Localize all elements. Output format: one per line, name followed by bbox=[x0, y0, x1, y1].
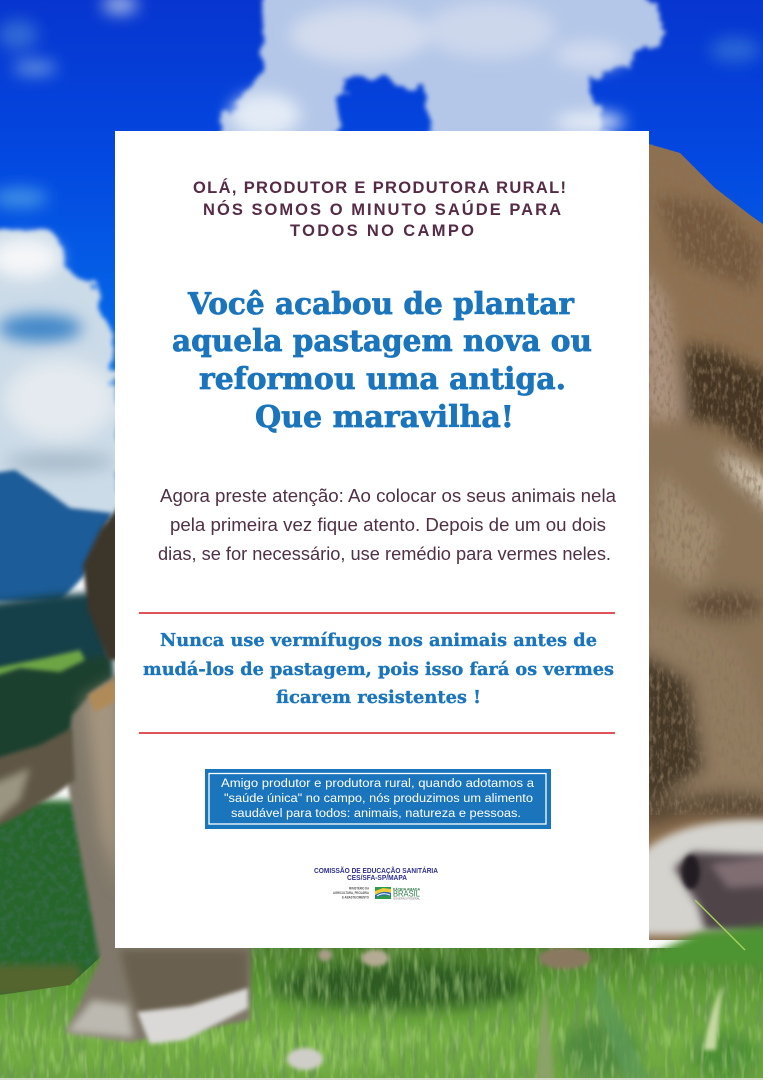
warning block: mudá-los de pastagem, pois isso fará os vermes bbox=[143, 659, 614, 680]
government logos: E ABASTECIMENTO bbox=[342, 896, 369, 900]
warning block: Nunca use vermífugos nos animais antes de bbox=[160, 630, 597, 651]
dark head shape bbox=[83, 505, 120, 660]
greeting heading: OLÁ, PRODUTOR E PRODUTORA RURAL! bbox=[193, 178, 566, 197]
ear bbox=[0, 728, 75, 830]
left cow bbox=[0, 505, 250, 1044]
main title: reformou uma antiga. bbox=[199, 362, 566, 397]
callout: saúde única: saudável para todos: animais, natureza e pessoas. bbox=[231, 806, 521, 820]
greeting heading: NÓS SOMOS O MINUTO SAÚDE PARA bbox=[203, 200, 561, 219]
white panel bbox=[115, 131, 649, 948]
warning block bbox=[139, 612, 615, 734]
left cloud bbox=[0, 228, 125, 520]
front grass over cow chin bbox=[649, 925, 763, 965]
forest bbox=[0, 592, 120, 770]
meadow bbox=[0, 650, 85, 676]
body paragraph: dias, se for necessário, use remédio para vermes neles. bbox=[158, 544, 611, 564]
callout: saúde única: "saúde única" no campo, nós produzimos um alimento bbox=[224, 791, 533, 805]
main title: aquela pastagem nova ou bbox=[172, 324, 592, 359]
icon: Brazil flag mark bbox=[375, 887, 391, 899]
grass bbox=[0, 948, 763, 1080]
mountains bbox=[0, 470, 112, 602]
top clouds bbox=[0, 0, 760, 208]
neck bbox=[65, 672, 250, 1042]
distant legs bbox=[318, 947, 591, 969]
government logos: BRASIL bbox=[393, 890, 421, 898]
government logos: GOVERNO FEDERAL bbox=[393, 898, 421, 900]
footer credit: COMISSÃO DE EDUCAÇÃO SANITÁRIA bbox=[314, 866, 438, 875]
right cow bbox=[630, 143, 763, 940]
government logos: PÁTRIA AMADA bbox=[393, 886, 420, 892]
cow muzzle bbox=[640, 819, 763, 935]
callout: saúde única bbox=[205, 769, 551, 829]
greeting heading bbox=[193, 178, 566, 240]
foreground blades bbox=[536, 970, 722, 1080]
body paragraph: Agora preste atenção: Ao colocar os seus animais nela bbox=[160, 486, 617, 506]
tree bbox=[0, 800, 110, 1000]
government logos: AGRICULTURA, PECUÁRIA bbox=[333, 890, 369, 895]
greeting heading: TODOS NO CAMPO bbox=[290, 222, 474, 240]
sky bbox=[0, 0, 763, 520]
main title: Você acabou de plantar bbox=[187, 287, 575, 322]
body paragraph: pela primeira vez fique atento. Depois de um ou dois bbox=[170, 515, 606, 535]
callout: saúde única: Amigo produtor e produtora rural, quando adotamos a bbox=[221, 776, 534, 790]
footer credit: CES/SFA-SP/MAPA bbox=[347, 875, 407, 882]
main title: Que maravilha! bbox=[255, 400, 514, 435]
body paragraph bbox=[158, 486, 617, 564]
footer credit bbox=[314, 866, 438, 882]
government logos bbox=[333, 886, 421, 900]
warning block: ficarem resistentes ! bbox=[276, 687, 481, 708]
muzzle bbox=[120, 950, 248, 1020]
stone bbox=[287, 1048, 323, 1070]
main title bbox=[172, 287, 592, 435]
government logos: MINISTÉRIO DA bbox=[349, 886, 369, 890]
